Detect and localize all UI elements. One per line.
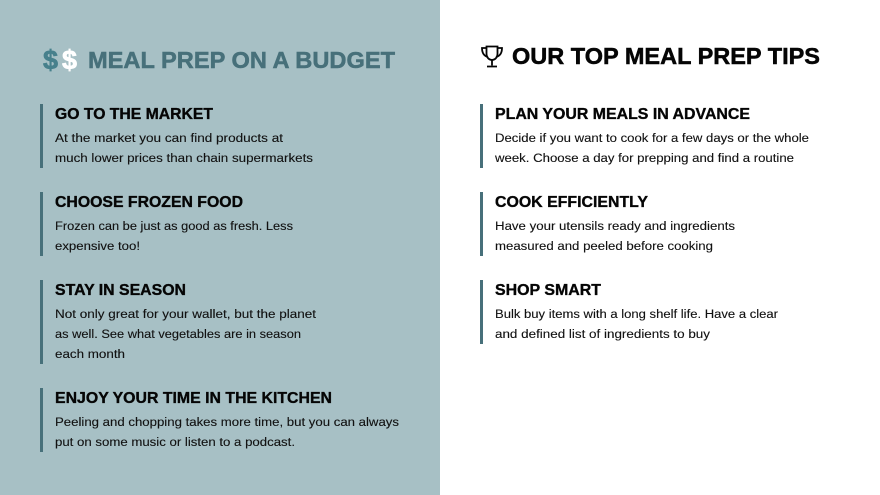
tip: shop smart bbox=[480, 280, 778, 344]
tip: enjoy your time in the kitchen: put on some music or listen to a podcast. bbox=[55, 435, 295, 449]
tip: enjoy your time in the kitchen bbox=[40, 388, 399, 452]
tip: go to the market: much lower prices than chain supermarkets bbox=[55, 151, 313, 165]
tip: shop smart: SHOP SMART bbox=[495, 282, 602, 299]
tip: stay in season bbox=[40, 280, 317, 364]
icon: dollar signs bbox=[43, 45, 77, 75]
tip: plan your meals in advance: PLAN YOUR MEALS IN ADVANCE bbox=[495, 106, 750, 123]
tip: choose frozen food bbox=[40, 192, 293, 256]
tip: go to the market: GO TO THE MARKET bbox=[55, 106, 214, 123]
panel: budget background bbox=[0, 0, 440, 495]
tip: cook efficiently bbox=[480, 192, 735, 256]
tip: cook efficiently: Have your utensils ready and ingredients bbox=[495, 219, 735, 233]
tip: cook efficiently: COOK EFFICIENTLY bbox=[495, 194, 649, 211]
heading: our top meal prep tips: OUR TOP MEAL PREP TIPS bbox=[512, 43, 820, 69]
panel: meal prep on a budget bbox=[40, 45, 399, 452]
tip: plan your meals in advance: week. Choose a day for prepping and find a routine bbox=[494, 151, 794, 165]
tip: stay in season: each month bbox=[55, 347, 125, 361]
tip: choose frozen food: Frozen can be just as good as fresh. Less bbox=[55, 219, 293, 233]
icon: dollar signs: $ bbox=[62, 45, 77, 75]
tip: stay in season: STAY IN SEASON bbox=[55, 282, 186, 299]
tip: plan your meals in advance: Decide if you want to cook for a few days or the whole bbox=[495, 131, 809, 145]
tip: enjoy your time in the kitchen: Peeling and chopping takes more time, but you can always bbox=[55, 415, 399, 429]
tip: shop smart: Bulk buy items with a long shelf life. Have a clear bbox=[495, 307, 778, 321]
tip: plan your meals in advance bbox=[480, 104, 809, 168]
tip: enjoy your time in the kitchen: ENJOY YOUR TIME IN THE KITCHEN bbox=[55, 390, 332, 407]
tip: go to the market bbox=[40, 104, 313, 168]
tip: cook efficiently: measured and peeled before cooking bbox=[495, 239, 713, 253]
tip: go to the market: At the market you can find products at bbox=[55, 131, 284, 145]
icon: dollar signs: $ bbox=[43, 45, 58, 75]
tip: stay in season: Not only great for your wallet, but the planet bbox=[55, 307, 317, 321]
panel: our top meal prep tips bbox=[480, 43, 820, 344]
tip: choose frozen food: CHOOSE FROZEN FOOD bbox=[55, 194, 243, 211]
tip: shop smart: and defined list of ingredients to buy bbox=[495, 327, 711, 341]
icon: trophy bbox=[482, 46, 502, 66]
tip: choose frozen food: expensive too! bbox=[55, 239, 140, 253]
tip: stay in season: as well. See what vegetables are in season bbox=[55, 327, 301, 341]
heading: meal prep on a budget: MEAL PREP ON A BUDGET bbox=[88, 47, 396, 73]
